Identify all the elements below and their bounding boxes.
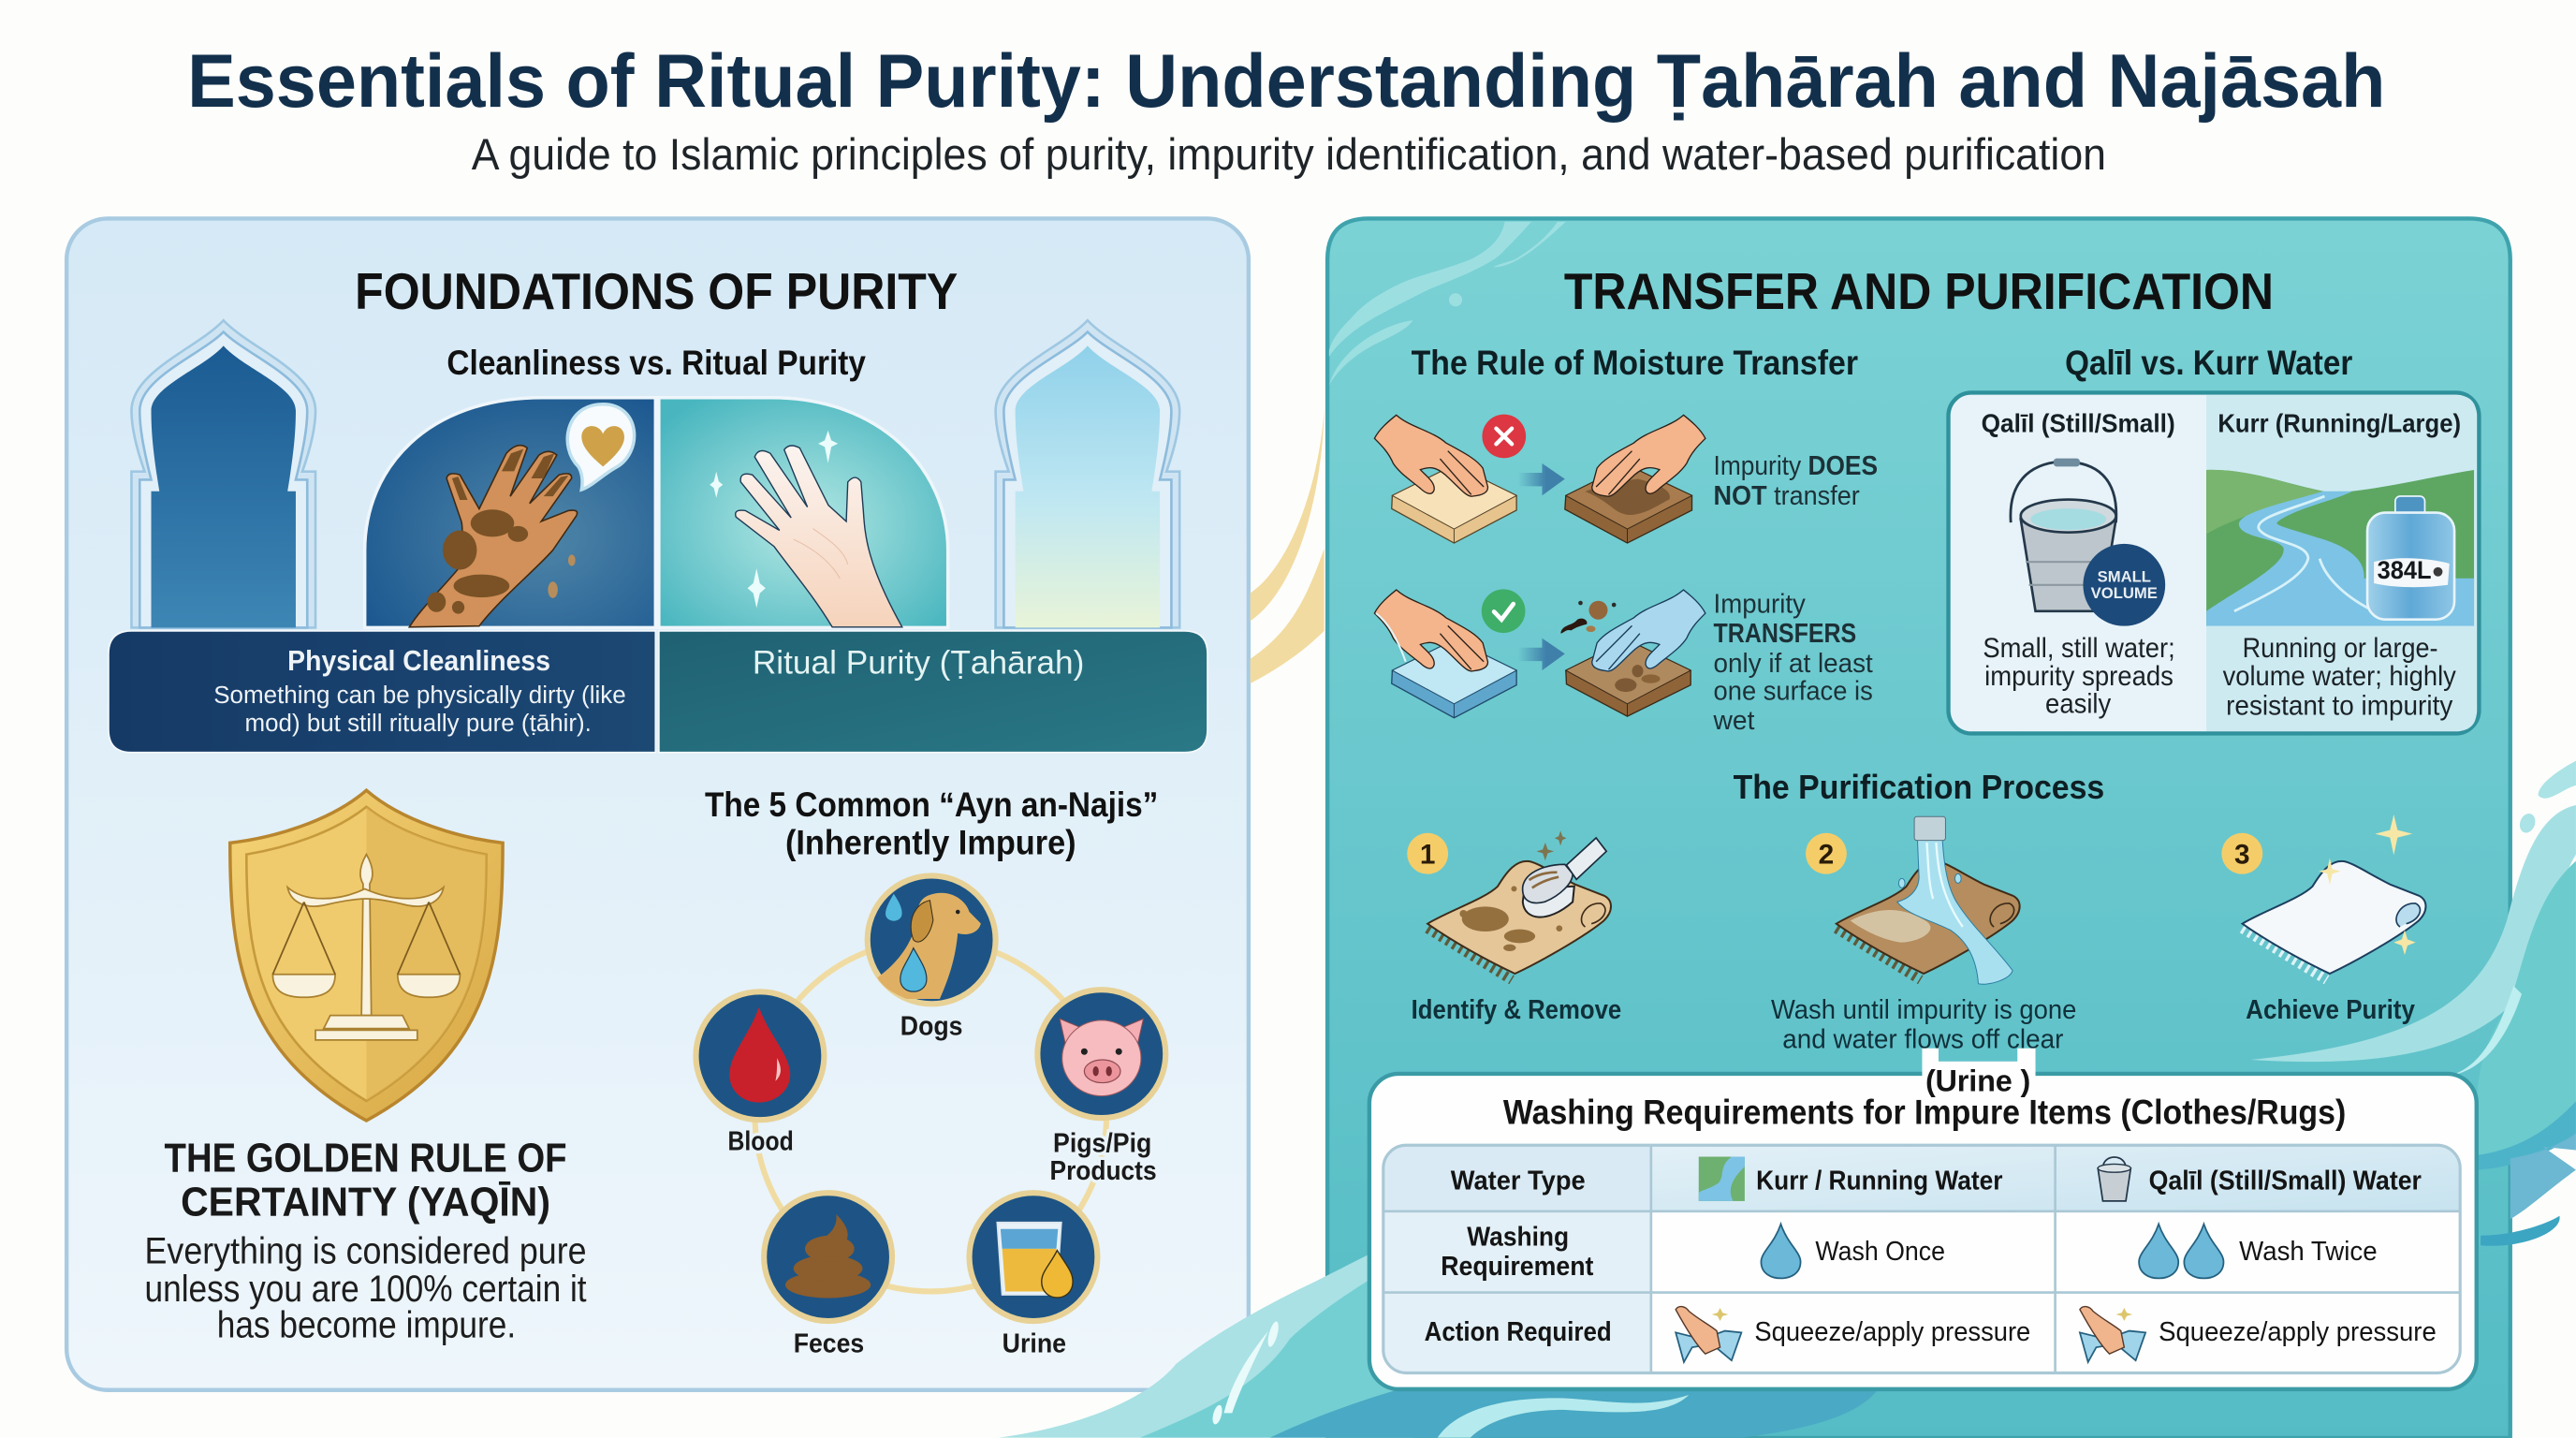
diagram: moisture transfer: [1374, 415, 1705, 718]
arrow: [1518, 463, 1565, 495]
artefact label: urine: (Urine ): [1925, 1064, 2030, 1097]
icon: mud drops: [548, 554, 576, 598]
row: water type: Qalīl (Still/Small) Water: [2149, 1167, 2422, 1196]
badge: 2: 2: [1819, 839, 1834, 870]
label bar: physical cleanliness vs ritual purity: [109, 631, 1208, 753]
golden rule heading: THE GOLDEN RULE OF: [165, 1135, 567, 1181]
golden rule heading: [165, 1135, 567, 1225]
artefact label: urine: [1922, 1049, 2036, 1097]
badge: 1: 1: [1420, 839, 1435, 870]
text: impurity transfers when wet: one surface is: [1714, 677, 1873, 707]
text: impurity does not transfer: [1714, 451, 1878, 511]
label: kurr: Kurr (Running/Large): [2217, 409, 2461, 438]
label: ritual purity: Ritual Purity (Ṭahārah): [753, 645, 1084, 682]
label: physical cleanliness: [213, 644, 626, 737]
icon: clean rug: [2243, 814, 2425, 980]
badge: small volume: [2083, 544, 2165, 626]
row: action required: [1425, 1307, 2437, 1362]
label: feces: Feces: [794, 1328, 864, 1358]
row: action required: Squeeze/apply pressure: [1754, 1317, 2030, 1347]
row: water type: [1451, 1157, 2422, 1201]
badge: 2: [1806, 833, 1847, 874]
icon: sparkles: [710, 431, 838, 608]
scales: [272, 855, 460, 1040]
label: identify and remove: Identify & Remove: [1412, 995, 1621, 1025]
card heading: Washing Requirements for Impure Items (Clothes/Rugs): [1503, 1093, 2346, 1131]
label: physical cleanliness: Physical Cleanliness: [287, 644, 550, 677]
icon: two drops: [2139, 1224, 2223, 1278]
heading: 5 common ayn an-najis: (Inherently Impure): [785, 824, 1076, 862]
icon: one drop: [1761, 1224, 1801, 1278]
illustration: river and tank: [2206, 470, 2474, 626]
badge: 1: [1407, 833, 1448, 874]
row: dry surface: [1374, 415, 1705, 543]
row: water type: Kurr / Running Water: [1756, 1167, 2002, 1196]
arch: right light: [996, 320, 1179, 627]
row: water type: Water Type: [1451, 1167, 1586, 1196]
text: qalil description: easily: [2045, 689, 2111, 720]
label: physical cleanliness: Something can be physically dirty (like: [213, 681, 626, 709]
row: washing requirement: Wash Once: [1815, 1237, 1945, 1267]
water swirl top left of panel: [1329, 222, 1566, 385]
heading: 5 common ayn an-najis: [705, 785, 1158, 862]
badge: small volume: VOLUME: [2091, 584, 2158, 602]
icon: urine: [970, 1193, 1097, 1321]
water waves right edge: [2250, 761, 2576, 1246]
diagram: five impurities ring: [695, 875, 1165, 1358]
heading: foundations of purity: FOUNDATIONS OF PURITY: [355, 263, 958, 320]
text: kurr description: Running or large-: [2243, 633, 2438, 664]
text: impurity transfers when wet: only if at least: [1714, 649, 1873, 679]
icon: dog: [868, 875, 996, 1004]
label: achieve purity: Achieve Purity: [2246, 995, 2415, 1025]
icon: speech bubble with heart: [567, 404, 635, 490]
text: qalil description: [1983, 633, 2175, 720]
text: qalil description: impurity spreads: [1984, 661, 2174, 692]
title: Essentials of Ritual Purity: Understanding Ṭahārah and Najāsah: [187, 39, 2385, 124]
text: impurity transfers when wet: wet: [1713, 706, 1754, 736]
icon: squeezing hand: [2080, 1307, 2145, 1362]
text: qalil description: Small, still water;: [1983, 633, 2175, 664]
golden rule text: has become impure.: [217, 1305, 516, 1346]
icon: golden shield with scales: [230, 790, 503, 1121]
heading: purification process: The Purification Process: [1734, 768, 2104, 806]
text: kurr description: [2223, 633, 2456, 721]
panel: transfer and purification: [1327, 218, 2510, 1438]
icon: green check: [1482, 589, 1525, 633]
golden rule text: [145, 1231, 587, 1346]
label: pigs/pig products: Products: [1050, 1156, 1157, 1186]
icon: squeezing hand: [1676, 1307, 1741, 1362]
step 2: wash: [1771, 816, 2076, 1055]
label: urine: Urine: [1003, 1328, 1066, 1358]
text: kurr description: resistant to impurity: [2226, 690, 2452, 721]
icon: water tank: [2367, 496, 2454, 620]
heading: transfer and purification: TRANSFER AND PURIFICATION: [1564, 263, 2274, 320]
icon: bucket: [2011, 459, 2165, 626]
icon: red cross: [1482, 415, 1526, 458]
label: qalil: Qalīl (Still/Small): [1982, 409, 2175, 438]
subheading: rule of moisture transfer: The Rule of Moisture Transfer: [1412, 344, 1858, 382]
card: qalil vs kurr comparison: [1949, 392, 2479, 733]
step 1: identify and remove: [1407, 830, 1621, 1025]
icon: bucket thumbnail: [2098, 1157, 2130, 1201]
card: washing requirements: [1369, 1049, 2477, 1389]
label: pigs/pig products: Pigs/Pig: [1053, 1128, 1151, 1158]
subtitle: A guide to Islamic principles of purity, impurity identification, and water-based purification: [472, 130, 2106, 180]
label: blood: Blood: [728, 1127, 794, 1157]
icon: dirty rug with brush: [1427, 830, 1611, 980]
decorative gold swoosh: [1251, 409, 1325, 683]
water waves bottom: [999, 1252, 1878, 1438]
icon: blood: [695, 991, 824, 1120]
arrow: [1518, 638, 1565, 670]
badge: 3: [2221, 833, 2262, 874]
table: [1383, 1145, 2461, 1373]
heading: 5 common ayn an-najis: The 5 Common “Ayn an-Najis”: [705, 785, 1158, 824]
text: impurity does not transfer: Impurity DOES: [1714, 451, 1878, 481]
label: wash until clear: [1771, 995, 2076, 1055]
icon: pig: [1037, 990, 1165, 1118]
arch: left dark: [131, 320, 315, 627]
row: washing requirement: Wash Twice: [2239, 1237, 2378, 1267]
badge: 3: 3: [2234, 839, 2250, 870]
row: action required: Action Required: [1425, 1317, 1612, 1347]
icon: clean hand: [736, 446, 902, 627]
golden rule text: Everything is considered pure: [145, 1231, 587, 1272]
label: physical cleanliness: mod) but still ritually pure (ṭāhir).: [245, 709, 592, 737]
badge: small volume: SMALL: [2098, 567, 2151, 585]
label: dogs: Dogs: [900, 1012, 963, 1042]
comparison: dirty hand panel: [365, 398, 655, 627]
row: action required: Squeeze/apply pressure: [2159, 1317, 2437, 1347]
subheading: cleanliness vs ritual purity: Cleanliness vs. Ritual Purity: [446, 344, 866, 382]
subheading: qalil vs kurr water: Qalīl vs. Kurr Water: [2065, 344, 2352, 382]
row: washing requirement: Requirement: [1441, 1252, 1594, 1282]
text: impurity transfers when wet: [1713, 590, 1873, 736]
row: washing requirement: Washing: [1467, 1222, 1569, 1252]
step 3: achieve purity: [2221, 814, 2425, 1025]
text: impurity does not transfer: NOT transfer: [1714, 481, 1860, 511]
comparison: clean hand panel: [659, 398, 948, 627]
text: impurity transfers when wet: Impurity: [1714, 590, 1806, 620]
label: pigs/pig products: [1050, 1128, 1157, 1186]
text: impurity transfers when wet: TRANSFERS: [1714, 619, 1856, 649]
icon: dirty hand: [409, 446, 578, 627]
label: wash until clear: Wash until impurity is gone: [1771, 995, 2076, 1025]
icon: impurity debris: [1560, 601, 1616, 634]
golden rule heading: CERTAINTY (YAQĪN): [181, 1180, 550, 1225]
icon: rug under running water: [1837, 816, 2020, 984]
row: wet surface: [1374, 589, 1705, 718]
icon: river thumbnail: [1699, 1157, 1745, 1201]
panel: foundations of purity: [66, 218, 1249, 1390]
icon: water tank: 384L: [2378, 555, 2431, 584]
text: kurr description: volume water; highly: [2223, 661, 2456, 692]
label: wash until clear: and water flows off clear: [1782, 1025, 2064, 1055]
golden rule text: unless you are 100% certain it: [145, 1269, 587, 1310]
icon: feces: [764, 1193, 892, 1321]
row: washing requirement: [1441, 1222, 2378, 1282]
